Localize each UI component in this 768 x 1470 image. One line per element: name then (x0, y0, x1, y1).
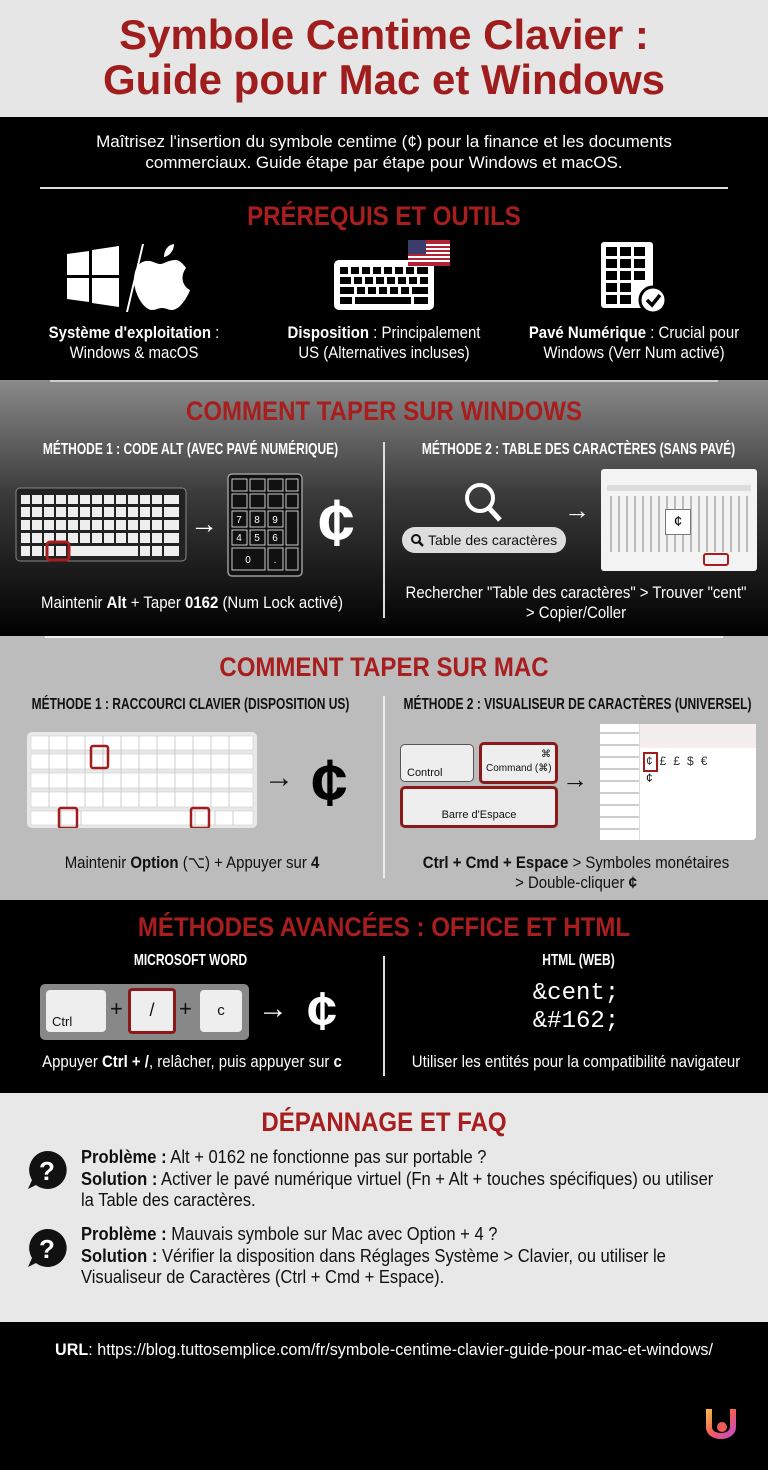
subheading: méthode 1 mac: MÉTHODE 1 : RACCOURCI CLAVIER (DISPOSITION US) (32, 696, 349, 713)
keys: ctrl / c: c (217, 1002, 225, 1019)
keys: control command space: Control (407, 767, 442, 779)
caption: windows method 2: Rechercher "Table des caractères" > Trouver "cent" (406, 583, 746, 602)
caption: mac method 1: Maintenir Option (⌥) + Appuyer sur 4 (65, 853, 319, 872)
icon: question bubble: ? (39, 1156, 55, 1186)
intro text: Maîtrisez l'insertion du symbole centime (¢) pour la finance et les documents (96, 132, 672, 151)
keys: ctrl / c: Ctrl (52, 1014, 72, 1029)
keys: control command space: Barre d'Espace (442, 809, 516, 821)
search pill: Table des caractères (428, 532, 557, 548)
faq item 2 (28, 1224, 666, 1287)
screenshot: character map (601, 469, 757, 571)
icon: keyboard with US flag (334, 240, 450, 310)
intro text: commerciaux. Guide étape par étape pour Windows et macOS. (145, 153, 623, 172)
panel: faq (0, 1093, 768, 1322)
keys: ctrl / c: / (149, 1000, 154, 1020)
html entities (533, 980, 619, 1035)
illustration: mac keyboard (27, 732, 257, 828)
title: Symbole Centime Clavier : (119, 11, 649, 58)
caption: mac method 2: > Double-cliquer ¢ (515, 873, 637, 892)
heading: advanced: MÉTHODES AVANCÉES : OFFICE ET HTML (138, 912, 630, 942)
icon: question bubble (28, 1229, 67, 1267)
heading: prérequis: PRÉREQUIS ET OUTILS (247, 201, 521, 231)
arrow: → (564, 495, 590, 525)
arrow: → (264, 761, 294, 794)
heading: windows: COMMENT TAPER SUR WINDOWS (186, 396, 582, 426)
icon: question bubble (28, 1151, 67, 1189)
label: pavé (529, 323, 739, 362)
panel: windows (0, 380, 768, 636)
subheading: méthode 2 windows: MÉTHODE 2 : TABLE DES CARACTÈRES (SANS PAVÉ) (422, 441, 735, 458)
intro text (96, 132, 672, 172)
cent symbol: ¢ (318, 485, 355, 559)
label: système: Système d'exploitation : (49, 323, 219, 342)
html entities: &#162; (533, 1008, 619, 1035)
illustration: numpad: 0 (245, 555, 251, 566)
screenshot: character viewer (600, 724, 756, 840)
screenshot: character map: ¢ (674, 513, 682, 530)
caption: windows method 2 (406, 583, 746, 622)
keys: control command space: Command (⌘) (486, 763, 552, 774)
icon: numeric keypad with check (601, 242, 664, 312)
subheading: html: HTML (WEB) (542, 952, 615, 969)
illustration: keyboard (16, 488, 186, 562)
caption: mac method 2 (423, 853, 729, 892)
caption: word: Appuyer Ctrl + /, relâcher, puis appuyer sur c (42, 1052, 342, 1071)
caption: mac method 2: Ctrl + Cmd + Espace > Symboles monétaires (423, 853, 729, 872)
keys: ctrl / c (40, 984, 249, 1040)
icon: question bubble: ? (39, 1234, 55, 1264)
heading: mac: COMMENT TAPER SUR MAC (219, 652, 549, 682)
keys: ctrl / c: + (179, 996, 192, 1021)
faq item 2: Visualiseur de Caractères (Ctrl + Cmd + Espace). (81, 1267, 444, 1287)
screenshot: character viewer: ¢ (646, 771, 653, 785)
illustration: numpad (227, 473, 303, 577)
label: pavé: Pavé Numérique : Crucial pour (529, 323, 739, 342)
illustration: numpad: 6 (272, 533, 278, 544)
cent symbol: ¢ (307, 981, 337, 1041)
caption: windows method 2: > Copier/Coller (526, 603, 626, 622)
caption: windows method 1: Maintenir Alt + Taper 0162 (Num Lock activé) (41, 593, 343, 612)
faq item 2: Problème : Mauvais symbole sur Mac avec Option + 4 ? (81, 1224, 497, 1244)
caption: html: Utiliser les entités pour la compatibilité navigateur (412, 1052, 740, 1071)
illustration: numpad: 5 (254, 533, 260, 544)
panel: intro and prerequisites (0, 117, 768, 380)
keys: control command space: ⌘ (541, 749, 551, 760)
arrow: → (190, 508, 218, 539)
subheading: méthode 2 mac: MÉTHODE 2 : VISUALISEUR DE CARACTÈRES (UNIVERSEL) (403, 696, 752, 713)
screenshot: character viewer: ¢££$€ (646, 754, 714, 768)
icon: logo (706, 1409, 736, 1439)
label: système: Windows & macOS (70, 343, 198, 362)
faq item 1 (28, 1147, 713, 1210)
title (103, 11, 665, 103)
cent symbol: ¢ (311, 745, 348, 819)
illustration: numpad: 9 (272, 515, 278, 526)
keys: ctrl / c: + (110, 996, 123, 1021)
label: système (49, 323, 219, 362)
label: pavé: Windows (Verr Num activé) (543, 343, 725, 362)
panel: mac (0, 636, 768, 900)
arrow: → (258, 992, 288, 1025)
illustration: numpad: 7 (236, 515, 242, 526)
subheading: méthode 1 windows: MÉTHODE 1 : CODE ALT (AVEC PAVÉ NUMÉRIQUE) (43, 441, 338, 458)
label: disposition (288, 323, 480, 362)
faq item 1: Solution : Activer le pavé numérique virtuel (Fn + Alt + touches spécifiques) ou utiliser (81, 1168, 713, 1188)
icon: magnifier (465, 483, 502, 522)
label: disposition: Disposition : Principalement (288, 323, 480, 342)
faq item 1: la Table des caractères. (81, 1190, 256, 1210)
icon: windows and apple (67, 244, 190, 312)
faq item 1: Problème : Alt + 0162 ne fonctionne pas sur portable ? (81, 1147, 487, 1167)
heading: faq: DÉPANNAGE ET FAQ (261, 1107, 507, 1137)
illustration: numpad: 8 (254, 515, 260, 526)
keys: control command space (400, 742, 558, 828)
search pill (402, 527, 566, 553)
footer url: URL: https://blog.tuttosemplice.com/fr/symbole-centime-clavier-guide-pour-mac-et-windows/ (55, 1340, 713, 1359)
illustration: numpad: 4 (236, 533, 242, 544)
title band (0, 0, 768, 117)
title: Guide pour Mac et Windows (103, 56, 665, 103)
arrow: → (562, 764, 588, 794)
faq item 2: Solution : Vérifier la disposition dans Réglages Système > Clavier, ou utiliser le (81, 1246, 666, 1266)
panel: advanced (0, 900, 768, 1093)
illustration: numpad: . (274, 555, 276, 566)
subheading: word: MICROSOFT WORD (134, 952, 247, 969)
label: disposition: US (Alternatives incluses) (298, 343, 470, 362)
html entities: &cent; (533, 980, 619, 1007)
